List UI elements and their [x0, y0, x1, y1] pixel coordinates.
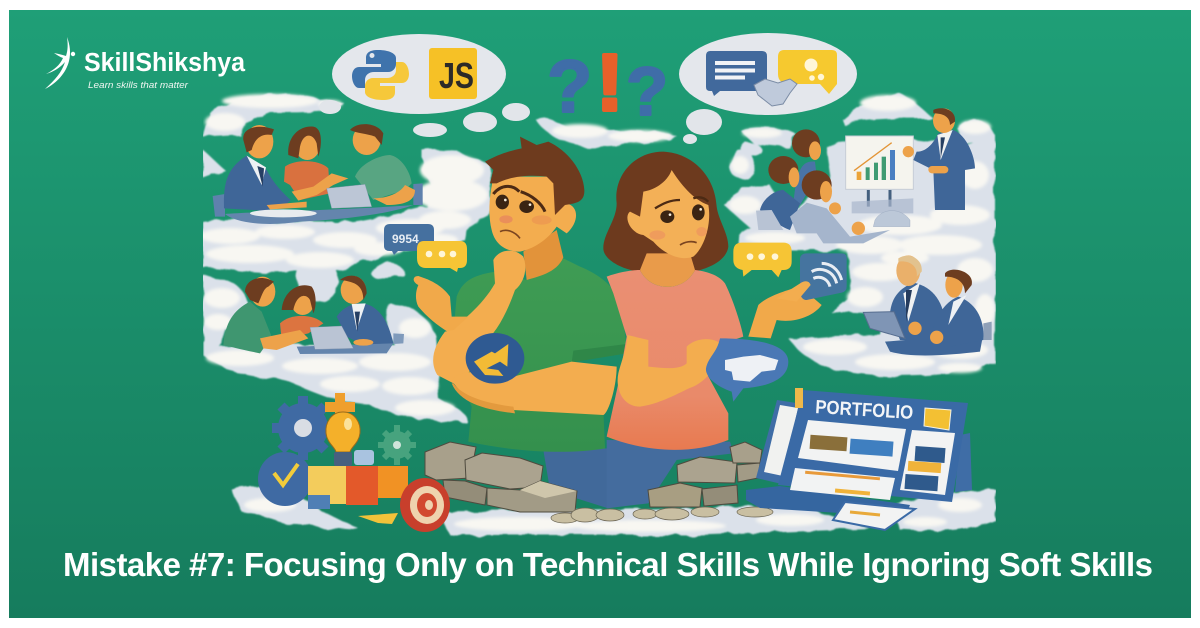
icon: JS badge: JS	[439, 55, 474, 96]
badge: blue handshake bubble	[706, 338, 788, 402]
badge: blue arrows	[466, 333, 524, 384]
stone wall left	[425, 442, 577, 512]
face	[489, 177, 576, 252]
cloud: base layer	[203, 94, 996, 535]
laptop	[863, 312, 905, 338]
presenter	[903, 108, 975, 210]
title text: PORTFOLIO	[815, 397, 914, 424]
blue bubble with numbers: 9954	[392, 232, 419, 246]
base	[746, 486, 910, 517]
board	[778, 390, 968, 502]
jeans	[607, 440, 733, 508]
icon cluster bottom left	[258, 393, 450, 532]
icon: yellow shard	[358, 513, 398, 524]
table and laptop	[225, 184, 413, 224]
icon: question and exclamation marks: ?	[547, 45, 592, 128]
icon: python logo	[352, 50, 409, 100]
card	[833, 502, 915, 530]
icon: blue chat bubble	[706, 51, 767, 96]
content panels	[798, 420, 906, 471]
presentation board	[846, 136, 913, 213]
folded arm	[452, 362, 617, 415]
icon: check badge	[258, 452, 312, 506]
icon: green gear	[378, 425, 416, 465]
icon: question and exclamation marks	[547, 38, 668, 130]
logo	[45, 37, 246, 91]
scene: presenter with chart	[756, 108, 975, 243]
raised arm and hand	[748, 287, 822, 338]
thought bubble: technical skills	[332, 34, 506, 114]
thumb	[777, 281, 811, 302]
raised hand	[414, 276, 468, 333]
yellow chat bubble	[733, 243, 792, 277]
clouds backdrop	[200, 94, 996, 535]
yellow note	[924, 408, 951, 430]
small thought puffs	[319, 100, 722, 144]
younger man	[908, 270, 983, 347]
shirt	[453, 258, 627, 452]
eyes and mouth	[655, 197, 708, 245]
icon: logo swoosh figure	[45, 37, 75, 89]
table and laptop	[260, 326, 404, 354]
yellow bubble	[417, 241, 467, 272]
yellow clip	[795, 388, 803, 408]
stand	[955, 433, 972, 492]
icon: target	[400, 478, 450, 532]
arm to chin with hand	[443, 251, 525, 347]
face	[627, 170, 709, 258]
thought bubble: soft skills	[679, 33, 857, 115]
character: girl in pink shirt	[603, 152, 847, 508]
icon: lightbulb	[326, 412, 374, 466]
older man	[890, 255, 945, 340]
woman in orange	[284, 127, 348, 201]
man in green	[350, 124, 415, 205]
character: boy in green shirt	[414, 137, 627, 508]
scene: business pair with laptop	[863, 255, 992, 356]
left sheet	[756, 400, 803, 485]
hair	[603, 152, 728, 272]
cloud: white puffs	[200, 94, 995, 532]
suit man	[337, 276, 393, 347]
shirt	[607, 270, 743, 450]
eyes	[493, 186, 545, 238]
scene: team at table top left	[213, 124, 423, 224]
brand name: SkillShikshya	[84, 49, 246, 77]
icon: puzzle pieces	[308, 466, 408, 509]
elbow	[433, 327, 487, 385]
woman in orange	[280, 285, 323, 340]
tagline: Learn skills that matter	[88, 80, 189, 91]
icon: JS badge	[429, 48, 477, 99]
stone wall right	[551, 442, 773, 523]
suit man	[224, 125, 291, 211]
icon: orange cross	[325, 393, 355, 420]
neck	[523, 230, 563, 280]
icon: left chat bubbles	[384, 224, 467, 272]
base	[885, 333, 983, 356]
audience	[756, 129, 910, 243]
blue chat square	[800, 253, 847, 300]
man in green	[223, 277, 275, 353]
icon: blue gear	[272, 396, 335, 460]
icon: question and exclamation marks: !	[596, 38, 623, 127]
jeans	[543, 448, 608, 508]
icon: question and exclamation marks: ?	[626, 53, 668, 130]
scene: team at table mid left	[223, 276, 404, 354]
icon: yellow chat bubble	[778, 50, 837, 94]
chairs	[213, 183, 423, 217]
title: Mistake #7: Focusing Only on Technical Skills While Ignoring Soft Skills	[63, 546, 1153, 583]
lower arm and hand	[618, 335, 723, 407]
hair	[485, 137, 584, 215]
portfolio board	[746, 388, 972, 530]
neck	[640, 253, 695, 287]
icon: handshake	[754, 79, 797, 106]
